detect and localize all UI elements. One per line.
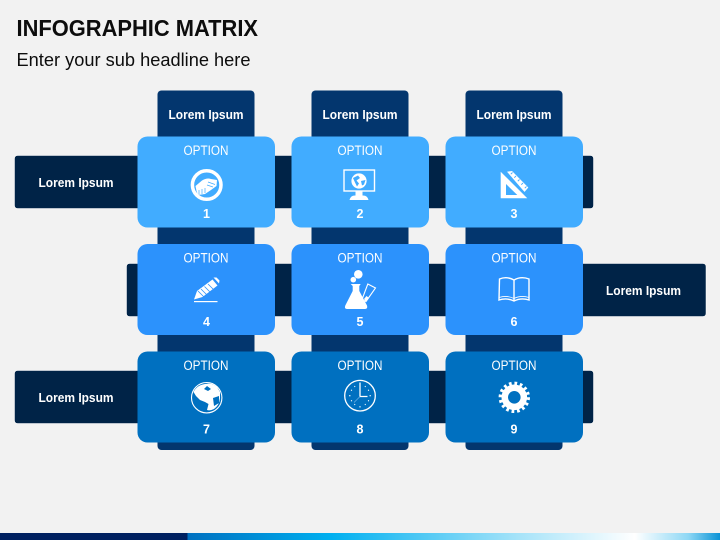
- row bar 1: [14, 156, 594, 208]
- row bar 3: Lorem Ipsum: [38, 391, 114, 405]
- icon: gear: [500, 383, 528, 411]
- card 2: 2: [357, 207, 364, 221]
- card 1: [138, 136, 275, 228]
- card 5: 5: [357, 315, 364, 329]
- card 9: [446, 352, 583, 442]
- icon: globe: [192, 382, 222, 413]
- icon: pencil: [194, 278, 220, 302]
- card 6: [446, 244, 583, 335]
- card 9: 9: [511, 422, 518, 436]
- card 9: OPTION: [492, 358, 536, 373]
- card 3: OPTION: [492, 143, 536, 158]
- bottom gradient bar: [0, 533, 720, 540]
- icon: monitor with globe: [344, 170, 374, 200]
- card 8: 8: [357, 422, 364, 436]
- card 8: [292, 352, 429, 442]
- card 4: 4: [203, 315, 210, 329]
- card 5: [292, 244, 429, 335]
- column bar 1: Lorem Ipsum: [168, 108, 244, 122]
- card 6: OPTION: [492, 250, 536, 266]
- icon: handshake: [192, 171, 221, 199]
- icon: clock: [345, 380, 375, 411]
- card 8: OPTION: [338, 358, 382, 373]
- row bar 2: Lorem Ipsum: [606, 284, 681, 298]
- subtitle: Enter your sub headline here: [16, 49, 250, 70]
- icon: open book: [499, 278, 529, 301]
- column bar 3: Lorem Ipsum: [476, 108, 552, 122]
- row bar 3: [14, 370, 594, 424]
- card 3: [446, 136, 583, 228]
- card 2: [292, 136, 429, 228]
- icon: flask: [345, 270, 376, 309]
- card 4: [138, 244, 275, 335]
- card 7: 7: [203, 422, 210, 436]
- card 4: OPTION: [184, 250, 228, 266]
- card 1: 1: [203, 207, 210, 221]
- card 3: 3: [511, 207, 518, 221]
- card 5: OPTION: [338, 250, 382, 266]
- card 2: OPTION: [338, 143, 382, 158]
- title: INFOGRAPHIC MATRIX: [16, 15, 258, 41]
- card 7: OPTION: [184, 358, 228, 373]
- row bar 2: [126, 264, 706, 316]
- card 7: [138, 352, 275, 442]
- icon: set square: [501, 171, 528, 198]
- column bar 1: [158, 90, 254, 450]
- column bar 2: Lorem Ipsum: [322, 108, 398, 122]
- card 6: 6: [511, 315, 518, 329]
- column bar 3: [466, 90, 562, 450]
- column bar 2: [312, 90, 408, 450]
- row bar 1: Lorem Ipsum: [38, 176, 114, 190]
- card 1: OPTION: [184, 143, 228, 158]
